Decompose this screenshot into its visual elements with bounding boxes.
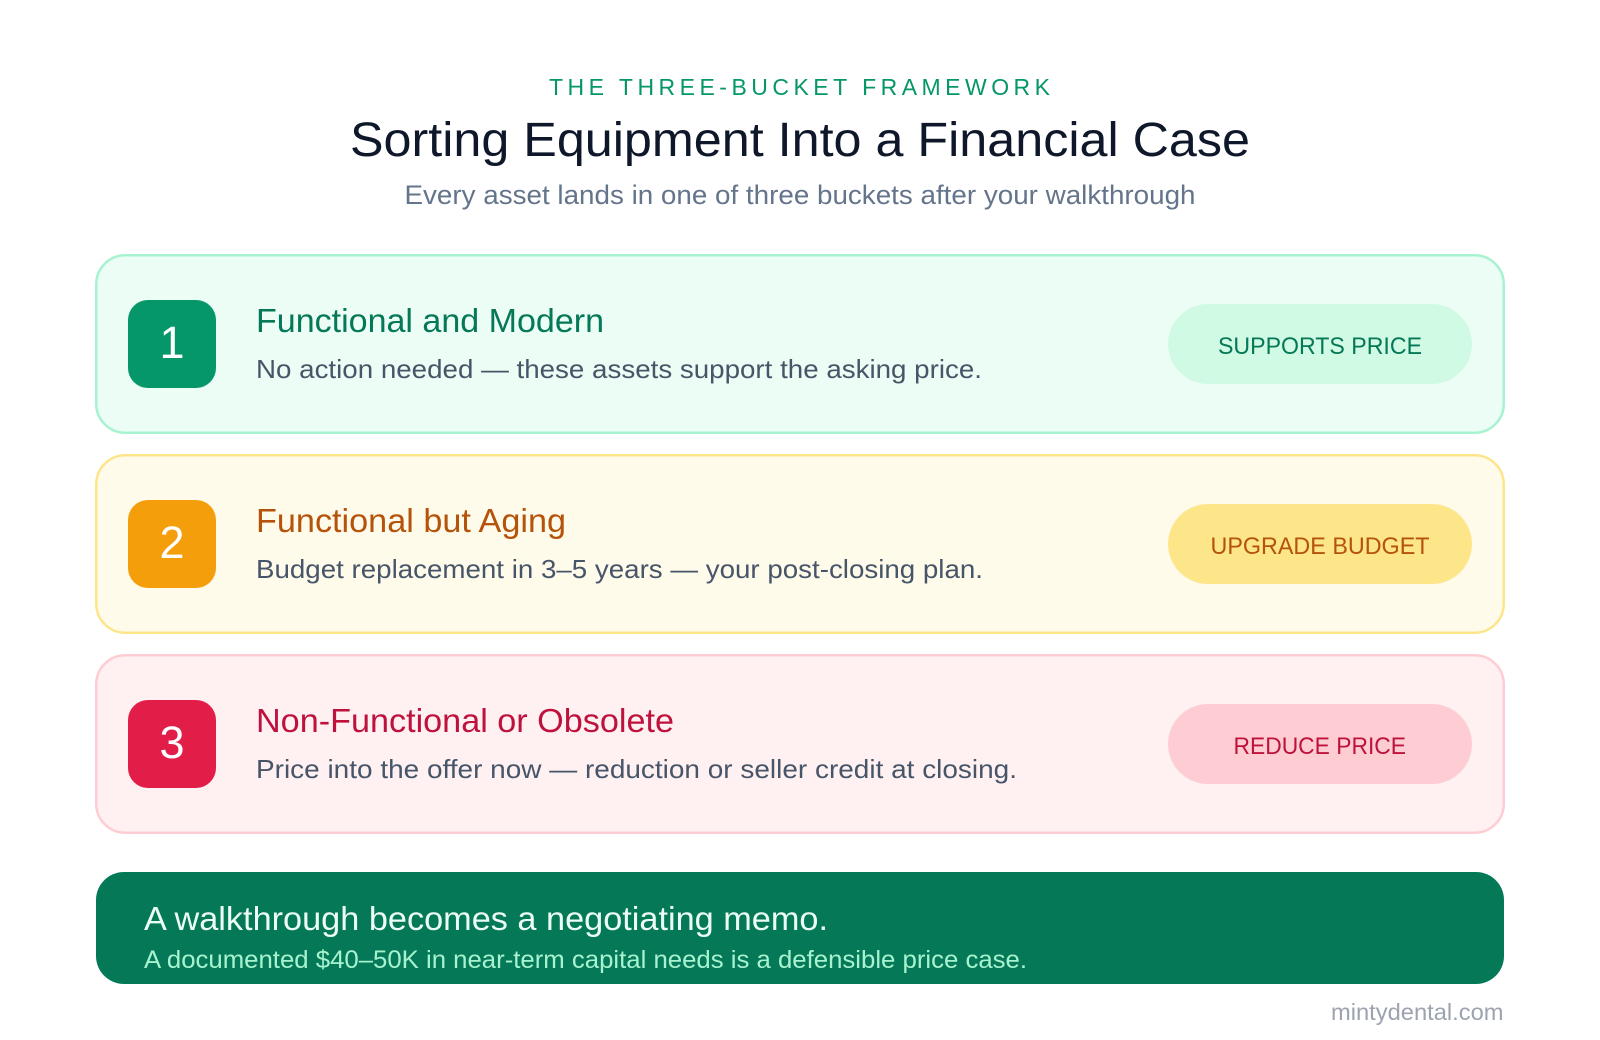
panel: bucket 3 non-functional or obsolete — [96, 655, 1504, 833]
banner: negotiating memo — [96, 872, 1504, 984]
pill: reduce price: REDUCE PRICE — [1234, 733, 1406, 760]
bucket 2 description: Budget replacement in 3–5 years — your post-closing plan. — [256, 554, 983, 584]
badge: number 3: 3 — [159, 717, 185, 768]
pill: upgrade budget: UPGRADE BUDGET — [1210, 533, 1430, 560]
watermark: mintydental.com — [1331, 999, 1504, 1025]
bucket 1 description: No action needed — these assets support the asking price. — [256, 354, 982, 384]
banner heading: A walkthrough becomes a negotiating memo. — [144, 901, 828, 938]
header — [350, 74, 1250, 210]
badge: number 2: 2 — [159, 517, 185, 568]
banner subtext: A documented $40–50K in near-term capital needs is a defensible price case. — [144, 946, 1027, 974]
bucket 2 heading: Functional but Aging — [256, 503, 566, 540]
pill: reduce price — [1168, 704, 1472, 784]
badge: number 1 — [128, 300, 216, 388]
pill: supports price — [1168, 304, 1472, 384]
eyebrow: THE THREE-BUCKET FRAMEWORK — [549, 74, 1051, 100]
bucket 1 heading: Functional and Modern — [256, 303, 604, 340]
panel: bucket 1 functional and modern — [96, 255, 1504, 433]
badge: number 1: 1 — [159, 317, 185, 368]
bucket 3 heading: Non-Functional or Obsolete — [256, 703, 674, 740]
pill: supports price: SUPPORTS PRICE — [1218, 333, 1422, 360]
pill: upgrade budget — [1168, 504, 1472, 584]
bucket 3 description: Price into the offer now — reduction or seller credit at closing. — [256, 754, 1017, 784]
title: Sorting Equipment Into a Financial Case — [350, 114, 1250, 167]
badge: number 2 — [128, 500, 216, 588]
subtitle: Every asset lands in one of three buckets after your walkthrough — [404, 180, 1196, 210]
badge: number 3 — [128, 700, 216, 788]
panel: bucket 2 functional but aging — [96, 455, 1504, 633]
